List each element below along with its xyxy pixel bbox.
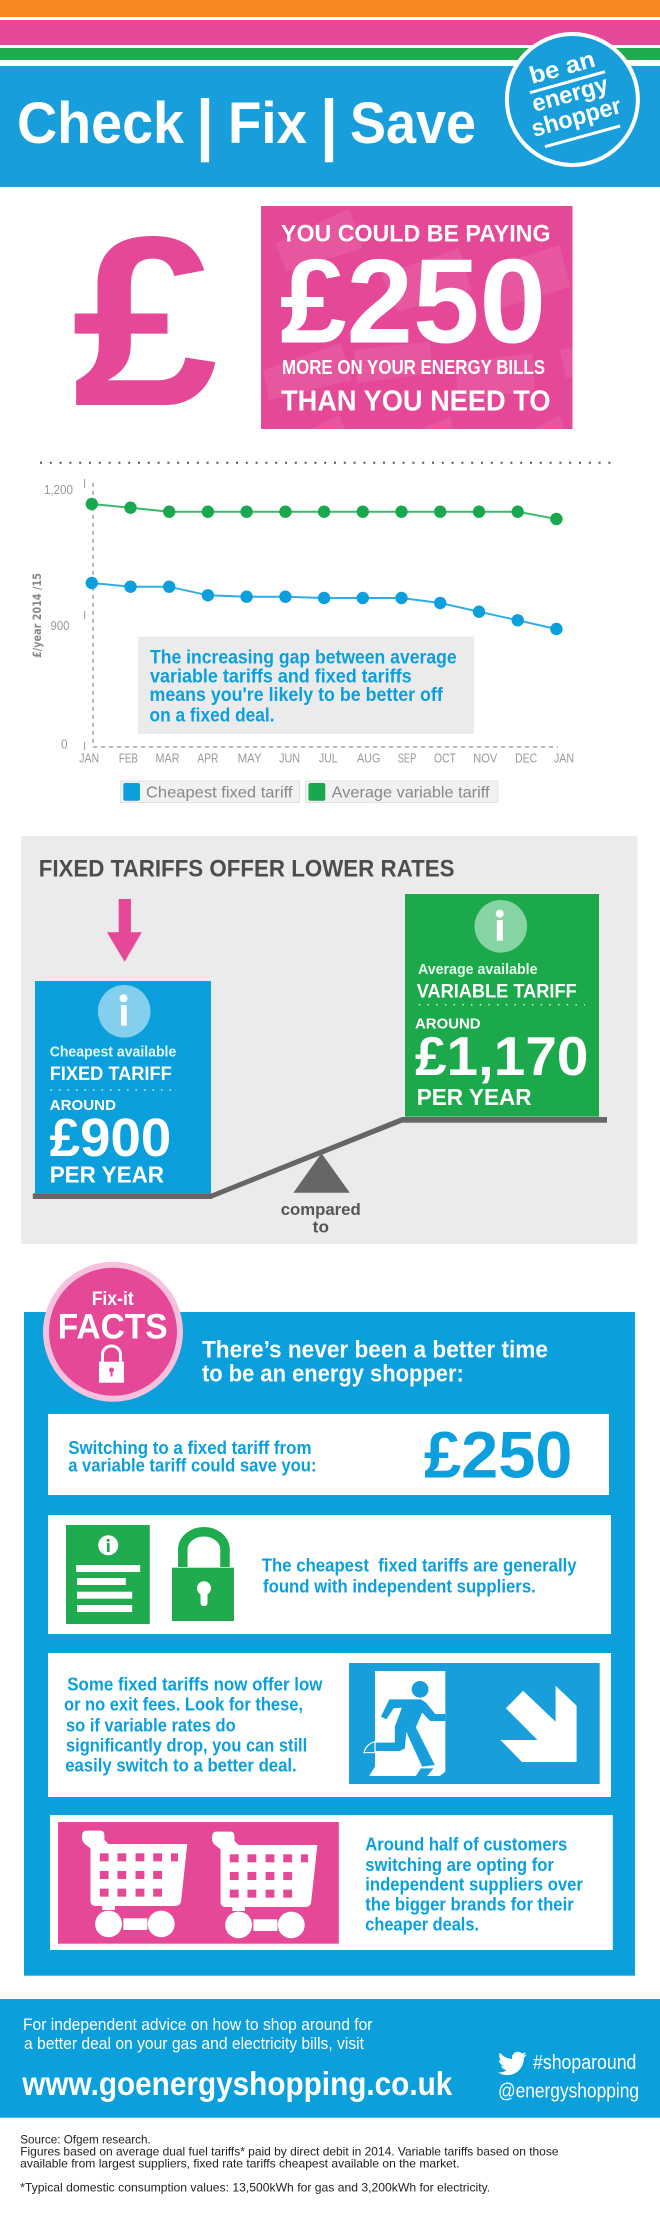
icon: first cart — [82, 1831, 187, 1937]
x axis labels: JUN — [279, 751, 300, 766]
y axis: 0 — [61, 737, 68, 752]
icon: info — [98, 985, 150, 1038]
footer call to action: For independent advice on how to shop around for — [23, 2016, 373, 2034]
panel: you could be paying 250 pounds more: YOU COULD BE PAYING — [281, 221, 550, 248]
fact row: saving: Switching to a fixed tariff from — [68, 1438, 312, 1458]
title — [17, 86, 476, 163]
card: fixed tariff: Cheapest available — [50, 1044, 176, 1061]
twitter handles — [498, 2052, 639, 2103]
fact row: independent suppliers: found with independent suppliers. — [263, 1576, 536, 1597]
fact row: exit fees: significantly drop, you can still — [66, 1735, 307, 1756]
icon: exit sign — [349, 1663, 600, 1784]
x axis labels: SEP — [398, 751, 416, 766]
fact row: half of customers: switching are opting for — [365, 1854, 554, 1875]
x axis labels: MAR — [156, 751, 180, 766]
compared to label: compared — [281, 1200, 361, 1219]
arrow: pink down — [107, 899, 142, 962]
card: variable tariff: VARIABLE TARIFF — [417, 980, 577, 1002]
badge: fix-it facts: Fix-it — [92, 1289, 134, 1310]
card: fixed tariff: PER YEAR — [50, 1162, 164, 1188]
y axis: 1,200 — [44, 482, 73, 497]
card: variable tariff: PER YEAR — [417, 1084, 532, 1110]
section heading: FIXED TARIFFS OFFER LOWER RATES — [39, 856, 454, 883]
badge: be an energy shopper: shopper — [528, 92, 624, 143]
chart callout: means you're likely to be better off — [150, 684, 443, 706]
card: variable tariff — [405, 894, 599, 1117]
x axis labels: MAY — [238, 751, 262, 766]
compared to label: to — [313, 1218, 329, 1237]
card: fixed tariff: £900 — [50, 1108, 171, 1168]
x axis labels: JAN — [79, 751, 99, 766]
title: | — [320, 86, 338, 163]
legend: Cheapest fixed tariff — [146, 785, 293, 802]
card: variable tariff: Average available — [418, 961, 538, 978]
panel: you could be paying 250 pounds more: £250 — [280, 234, 546, 368]
source notes — [20, 2132, 559, 2195]
legend: Average variable tariff — [332, 785, 490, 802]
card: fixed tariff: FIXED TARIFF — [50, 1063, 172, 1085]
panel: you could be paying 250 pounds more: THAN YOU NEED TO — [281, 386, 550, 418]
card: fixed tariff: AROUND — [50, 1097, 116, 1114]
x axis labels — [79, 751, 574, 766]
fact row: half of customers — [50, 1815, 613, 1950]
fact row: half of customers: independent suppliers over — [365, 1874, 583, 1895]
website url: www.goenergyshopping.co.uk — [21, 2065, 453, 2102]
card: variable tariff: £1,170 — [415, 1025, 588, 1087]
fact row: half of customers: the bigger brands for their — [365, 1894, 574, 1915]
badge: be an energy shopper: energy — [529, 71, 612, 118]
chart callout: The increasing gap between average — [150, 646, 457, 668]
footer call to action: a better deal on your gas and electricity bills, visit — [24, 2035, 364, 2053]
icon: padlock — [99, 1346, 124, 1383]
twitter handles: #shoparound — [533, 2052, 636, 2074]
card: fixed tariff — [35, 981, 211, 1193]
fact row: exit fees: easily switch to a better deal. — [65, 1755, 297, 1776]
title: | — [196, 86, 214, 163]
title: Fix — [228, 91, 307, 156]
panel: fix-it facts — [24, 1265, 635, 1976]
fact row: exit fees: so if variable rates do — [66, 1715, 236, 1736]
x axis labels: JUL — [319, 751, 338, 766]
source notes: *Typical domestic consumption values: 13,500kWh for gas and 3,200kWh for electricity. — [20, 2181, 490, 2195]
fact row: half of customers: Around half of customers — [365, 1834, 567, 1855]
icon: green padlock — [172, 1532, 234, 1621]
footer call to action — [0, 1999, 660, 2118]
y axis: £/year 2014 /15 — [30, 573, 44, 658]
large pound sign: £ — [72, 187, 218, 457]
x axis labels: JAN — [554, 751, 574, 766]
x axis labels: FEB — [119, 751, 138, 766]
fact row: exit fees: Some fixed tariffs now offer low — [67, 1674, 323, 1695]
x axis labels: APR — [197, 751, 218, 766]
badge: be an energy shopper: be an — [526, 46, 598, 90]
fact row: half of customers: cheaper deals. — [365, 1914, 479, 1935]
chart callout: variable tariffs and fixed tariffs — [150, 665, 412, 687]
fact row: exit fees — [48, 1653, 611, 1797]
source notes: Source: Ofgem research. — [20, 2132, 151, 2146]
panel: fixed tariffs offer lower rates — [21, 836, 638, 1244]
icon: shopping carts — [58, 1822, 339, 1944]
facts heading — [202, 1336, 548, 1388]
fact row: independent suppliers — [48, 1515, 611, 1634]
line chart: tariffs over time — [30, 479, 574, 802]
fact row: saving: a variable tariff could save you: — [68, 1456, 316, 1476]
y axis: 900 — [50, 618, 70, 633]
title: Check — [17, 91, 185, 156]
icon: info document — [66, 1525, 150, 1624]
x axis labels: AUG — [357, 751, 380, 766]
x axis labels: OCT — [434, 751, 456, 766]
y axis — [30, 479, 558, 752]
source notes: available from largest suppliers, fixed rate tariffs cheapest available on the market. — [20, 2156, 460, 2170]
badge: fix-it facts: FACTS — [58, 1307, 168, 1346]
panel: you could be paying 250 pounds more: MORE ON YOUR ENERGY BILLS — [282, 357, 545, 379]
seesaw balance — [33, 1117, 607, 1199]
fact row: exit fees: or no exit fees. Look for these, — [64, 1694, 303, 1715]
icon: twitter bird — [498, 2052, 527, 2075]
icon: second cart — [212, 1832, 317, 1938]
chart callout: on a fixed deal. — [150, 705, 274, 727]
icon: info — [474, 900, 527, 953]
title: Save — [350, 91, 476, 156]
legend — [120, 781, 498, 802]
fact row: saving: £250 — [424, 1417, 572, 1491]
compared to label — [281, 1200, 361, 1237]
fact row: independent suppliers: The cheapest fixed tariffs are generally — [262, 1555, 577, 1576]
panel: you could be paying 250 pounds more — [261, 206, 573, 429]
badge: be an energy shopper — [507, 34, 638, 165]
series: average variable tariff — [86, 498, 563, 525]
series: cheapest fixed tariff — [86, 577, 563, 635]
twitter handles: @energyshopping — [498, 2081, 639, 2103]
x axis labels: NOV — [473, 751, 498, 766]
source notes: Figures based on average dual fuel tariffs* paid by direct debit in 2014. Variable tariffs based on those — [20, 2144, 559, 2158]
chart callout — [138, 637, 474, 734]
facts heading: There’s never been a better time — [202, 1336, 548, 1363]
x axis labels: DEC — [515, 751, 537, 766]
badge: fix-it facts — [46, 1265, 180, 1399]
fact row: saving — [48, 1414, 609, 1495]
header banner — [0, 0, 660, 187]
card: variable tariff: AROUND — [415, 1015, 481, 1032]
facts heading: to be an energy shopper: — [202, 1361, 464, 1388]
